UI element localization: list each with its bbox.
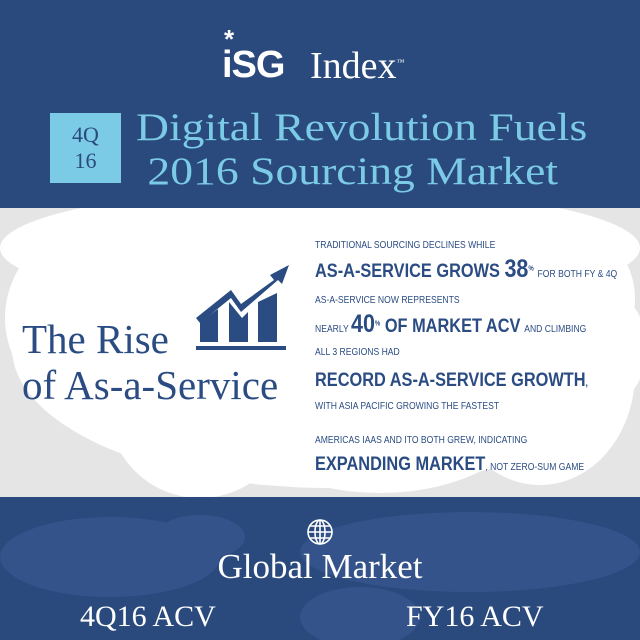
badge: 4Q 16 (50, 113, 121, 183)
text block: fact 4 (315, 435, 584, 475)
text block: fact 4: AMERICAS IAAS AND ITO BOTH GREW, INDICATING (315, 435, 527, 446)
badge: 4Q 16: 4Q (72, 122, 99, 147)
logo: ISG Index: Index™ (310, 45, 404, 87)
cloud shape (0, 208, 640, 497)
logo: ISG Index: * (224, 24, 234, 54)
title: Digital Revolution Fuels (136, 106, 587, 149)
text block: fact 2: AS-A-SERVICE NOW REPRESENTS (315, 295, 460, 306)
panel: rise of as-a-service (0, 208, 640, 497)
title (136, 106, 587, 193)
text block: fact 2: NEARLY 40% OF MARKET ACV AND CLIMBING (315, 310, 586, 338)
text block: fact 1: TRADITIONAL SOURCING DECLINES WHILE (315, 240, 495, 251)
icon: globe (307, 519, 333, 545)
text block: fact 3: ALL 3 REGIONS HAD (315, 347, 400, 358)
panel: global market (0, 497, 640, 640)
text block: fact 1: AS-A-SERVICE GROWS 38% FOR BOTH FY & 4Q (315, 255, 617, 283)
world map background (faint) (0, 512, 640, 640)
heading: The Rise of As-a-Service: The Rise (22, 316, 169, 362)
heading: The Rise of As-a-Service: of As-a-Service (22, 362, 278, 408)
icon: bar chart with arrow (196, 265, 289, 350)
title: 2016 Sourcing Market (147, 150, 558, 193)
text block: fact 3: WITH ASIA PACIFIC GROWING THE FASTEST (315, 401, 499, 412)
badge: 4Q 16: 16 (74, 148, 96, 173)
heading: The Rise of As-a-Service (22, 316, 278, 408)
text block: fact 4: EXPANDING MARKET, NOT ZERO-SUM GAME (315, 454, 584, 475)
logo: ISG Index (222, 24, 404, 87)
text block: fact 2 (315, 295, 586, 338)
text block: fact 1 (315, 240, 617, 283)
heading: Global Market: Global Market (217, 547, 423, 586)
header panel (0, 0, 640, 208)
logo: ISG Index: iSG (222, 44, 284, 86)
text block: fact 3: RECORD AS-A-SERVICE GROWTH, (315, 370, 588, 391)
text block: fact 3 (315, 347, 588, 412)
label: FY16 ACV: FY16 ACV (406, 600, 544, 633)
label: 4Q16 ACV: 4Q16 ACV (80, 600, 216, 633)
